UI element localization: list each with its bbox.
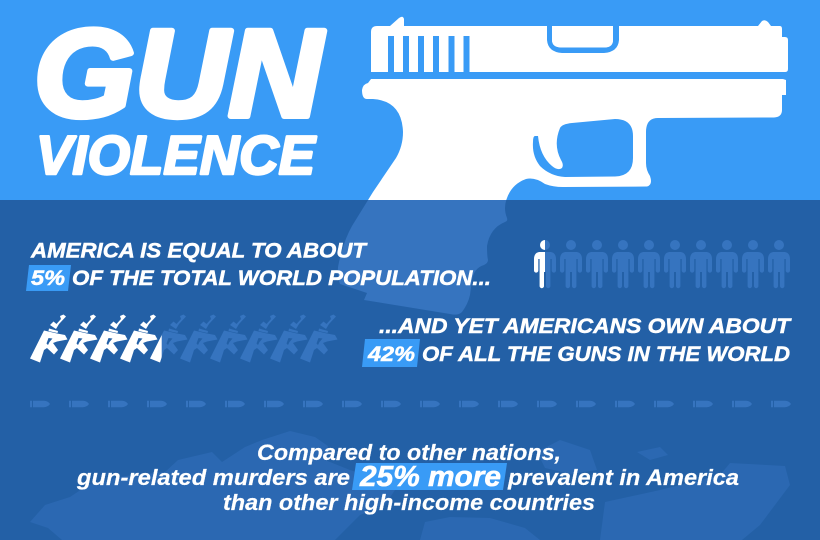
bullet row divider [30,401,791,407]
people icons: 5 percent of ten figures [534,240,790,288]
stat text: share of world guns: 42% [367,343,415,366]
rifle icons: 42 percent of ten rifles [30,314,338,362]
comparison statement: gun-related murders are [76,465,350,490]
pistol frame and grip [338,79,786,315]
comparison statement: prevalent in America [507,465,739,490]
comparison statement: than other high-income countries [223,490,595,515]
pistol slide [371,17,788,72]
stat text: share of world population: AMERICA IS EQUAL TO ABOUT [30,240,368,262]
title: VIOLENCE [36,124,317,186]
pistol illustration [338,17,788,315]
stat text: share of world population [26,240,491,291]
lower background [0,200,820,540]
highlight: 25% more: 25% more [359,461,501,493]
stat text: share of world guns: OF ALL THE GUNS IN THE WORLD [422,343,790,366]
comparison statement [76,440,739,515]
stat text: share of world population: 5% [31,267,65,290]
ejection port cover [552,29,613,48]
stat text: share of world guns [362,315,792,367]
comparison statement: Compared to other nations, [257,440,561,465]
header background [0,0,820,200]
stat text: share of world guns: ...AND YET AMERICANS OWN ABOUT [379,315,792,338]
title: GUN [34,5,325,143]
stat text: share of world population: OF THE TOTAL WORLD POPULATION... [72,267,491,290]
world map background [30,431,790,540]
